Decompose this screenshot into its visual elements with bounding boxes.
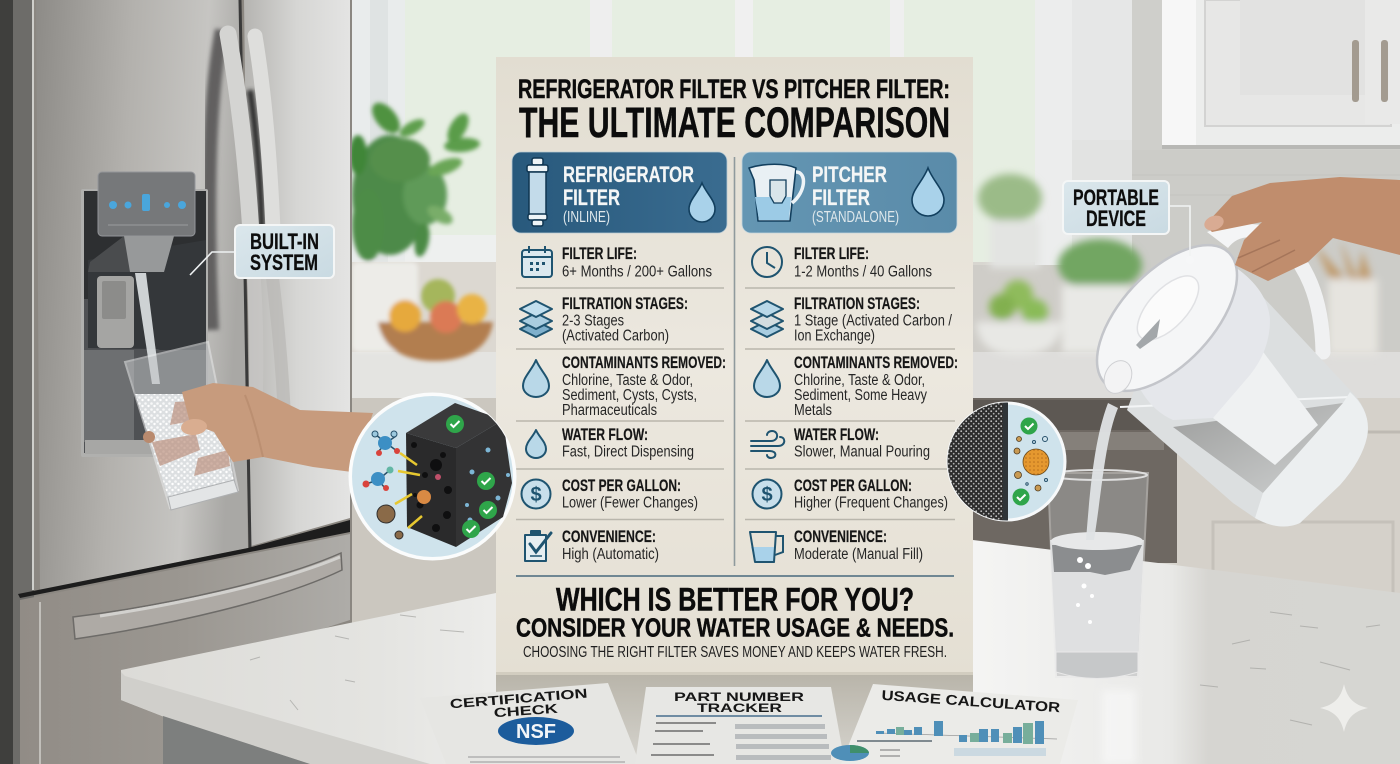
left row: filter life [522, 245, 712, 280]
conclusion text: CHOOSING THE RIGHT FILTER SAVES MONEY AND KEEPS WATER FRESH. [523, 644, 947, 661]
left row: filtration stages: 2-3 Stages [562, 312, 624, 330]
pouring water stream [1086, 403, 1118, 540]
heading: pitcher filter: FILTER [812, 185, 870, 210]
icon: stacked layers [751, 301, 783, 337]
document: part number tracker [635, 687, 845, 764]
document: part number tracker: PART NUMBER [674, 690, 804, 704]
right row: filter life: 1-2 Months / 40 Gallons [794, 264, 932, 280]
left row: cost per gallon: COST PER GALLON: [562, 477, 681, 495]
right row: convenience: Moderate (Manual Fill) [794, 546, 923, 563]
conclusion text [516, 582, 954, 661]
left row: cost per gallon: Lower (Fewer Changes) [562, 494, 698, 512]
hand gripping pitcher [1202, 177, 1400, 281]
refrigerator [0, 0, 352, 764]
NSF logo: NSF [516, 721, 556, 743]
right row: contaminants removed [754, 354, 958, 419]
heading: refrigerator filter: (INLINE) [563, 209, 610, 226]
right row: water flow: Slower, Manual Pouring [794, 444, 930, 460]
pitcher filter mesh magnifier [945, 400, 1066, 524]
row dividers [516, 288, 955, 520]
right row: filtration stages: 1 Stage (Activated Carbon / [794, 312, 953, 330]
right row: cost per gallon [752, 477, 948, 512]
icon: dollar coin [522, 480, 550, 508]
document: usage calculator: USAGE CALCULATOR [881, 687, 1061, 715]
icon: dollar coin: $ [530, 484, 542, 506]
column divider [734, 157, 736, 566]
water stream from dispenser [135, 273, 160, 384]
right row: contaminants removed: Sediment, Some Heavy [794, 387, 927, 404]
bar chart [876, 721, 1057, 744]
portable device callout: DEVICE [1086, 206, 1146, 231]
right row: filter life: FILTER LIFE: [794, 245, 869, 263]
left row: water flow: Fast, Direct Dispensing [562, 444, 694, 460]
water pitcher [1072, 221, 1368, 527]
refrigerator filter header [512, 152, 727, 233]
left row: convenience [525, 528, 659, 563]
left row: convenience: High (Automatic) [562, 546, 659, 563]
right row: contaminants removed: Metals [794, 402, 832, 419]
left row: water flow: WATER FLOW: [562, 426, 648, 444]
left row: water flow [526, 426, 694, 460]
conclusion text: WHICH IS BETTER FOR YOU? [556, 582, 914, 618]
right row: contaminants removed: Chlorine, Taste & Odor, [794, 372, 925, 389]
icon: pitcher [749, 164, 803, 221]
built-in system callout: BUILT-IN [250, 229, 319, 254]
right row: filtration stages: Ion Exchange) [794, 328, 875, 344]
icon: dollar coin: $ [761, 484, 773, 506]
title [518, 74, 950, 147]
water dispenser [81, 172, 208, 457]
heading: refrigerator filter: FILTER [563, 185, 620, 210]
drinking glass on counter [1048, 470, 1148, 678]
hand holding glass [143, 383, 373, 472]
document: certification check [420, 683, 640, 764]
conclusion divider [516, 575, 954, 577]
right row: convenience: CONVENIENCE: [794, 528, 887, 546]
built-in system callout: SYSTEM [250, 250, 318, 275]
right row: water flow: WATER FLOW: [794, 426, 879, 444]
blurred plants and fruit on window sill [349, 98, 1378, 361]
heading: pitcher filter: (STANDALONE) [812, 209, 899, 226]
icon: water drop [523, 360, 549, 397]
icon: calendar [522, 246, 552, 277]
heading: pitcher filter: PITCHER [812, 162, 887, 187]
right row: filter life [752, 245, 932, 280]
document: usage calculator [831, 684, 1078, 764]
built-in system callout [190, 225, 334, 278]
NSF logo [498, 717, 574, 745]
sparkle watermark [1320, 684, 1368, 732]
icon: inline filter cartridge [527, 158, 548, 226]
left row: contaminants removed: Sediment, Cysts, Cysts, [562, 387, 697, 404]
right row: cost per gallon: Higher (Frequent Changes) [794, 494, 948, 512]
upper wall cabinet [1162, 0, 1400, 149]
left row: filtration stages [520, 295, 688, 344]
document: part number tracker: TRACKER [697, 701, 782, 715]
left row: contaminants removed: Chlorine, Taste & Odor, [562, 372, 693, 389]
pitcher filter header [742, 152, 957, 233]
portable device callout [1063, 181, 1194, 264]
left row: contaminants removed: CONTAMINANTS REMOVED: [562, 354, 726, 372]
shaded base beneath poster [496, 672, 973, 764]
icon: clipboard check [525, 530, 551, 561]
document: certification check: CERTIFICATION [449, 686, 588, 711]
heading: refrigerator filter: REFRIGERATOR [563, 162, 694, 187]
icon: wind lines [751, 431, 784, 458]
left row: contaminants removed [523, 354, 726, 419]
document: certification check: CHECK [493, 701, 559, 720]
title: THE ULTIMATE COMPARISON [519, 99, 950, 147]
icon: measuring cup [750, 532, 783, 562]
icon: water drop [754, 360, 780, 397]
right row: cost per gallon: COST PER GALLON: [794, 477, 912, 495]
heading: pitcher filter [812, 162, 899, 226]
left row: filtration stages: FILTRATION STAGES: [562, 295, 688, 313]
right row: water flow [751, 426, 930, 460]
left row: cost per gallon [522, 477, 698, 512]
pie chart [831, 745, 869, 761]
right row: filtration stages: FILTRATION STAGES: [794, 295, 920, 313]
heading: refrigerator filter [563, 162, 694, 226]
right row: convenience [750, 528, 923, 563]
right row: filtration stages [751, 295, 953, 344]
left row: filter life: 6+ Months / 200+ Gallons [562, 264, 712, 280]
icon: clock [752, 247, 782, 277]
green check badges [446, 415, 497, 538]
poster panel [496, 57, 973, 675]
portable device callout: PORTABLE [1073, 185, 1159, 210]
conclusion text: CONSIDER YOUR WATER USAGE & NEEDS. [516, 612, 954, 642]
title: REFRIGERATOR FILTER VS PITCHER FILTER: [518, 74, 950, 104]
contaminant molecules [362, 431, 422, 539]
left row: contaminants removed: Pharmaceuticals [562, 402, 657, 419]
glass filled from fridge [125, 342, 238, 510]
activated carbon magnifier [348, 392, 516, 560]
left row: convenience: CONVENIENCE: [562, 528, 656, 546]
icon: water drop [912, 168, 944, 216]
right row: contaminants removed: CONTAMINANTS REMOVED: [794, 354, 958, 372]
icon: dollar coin [752, 480, 782, 508]
icon: water drop [689, 183, 715, 222]
icon: small water drop [526, 430, 546, 458]
icon: stacked layers [520, 301, 552, 337]
marble countertop [121, 540, 1400, 764]
left row: filter life: FILTER LIFE: [562, 245, 637, 263]
left row: filtration stages: (Activated Carbon) [562, 328, 669, 344]
